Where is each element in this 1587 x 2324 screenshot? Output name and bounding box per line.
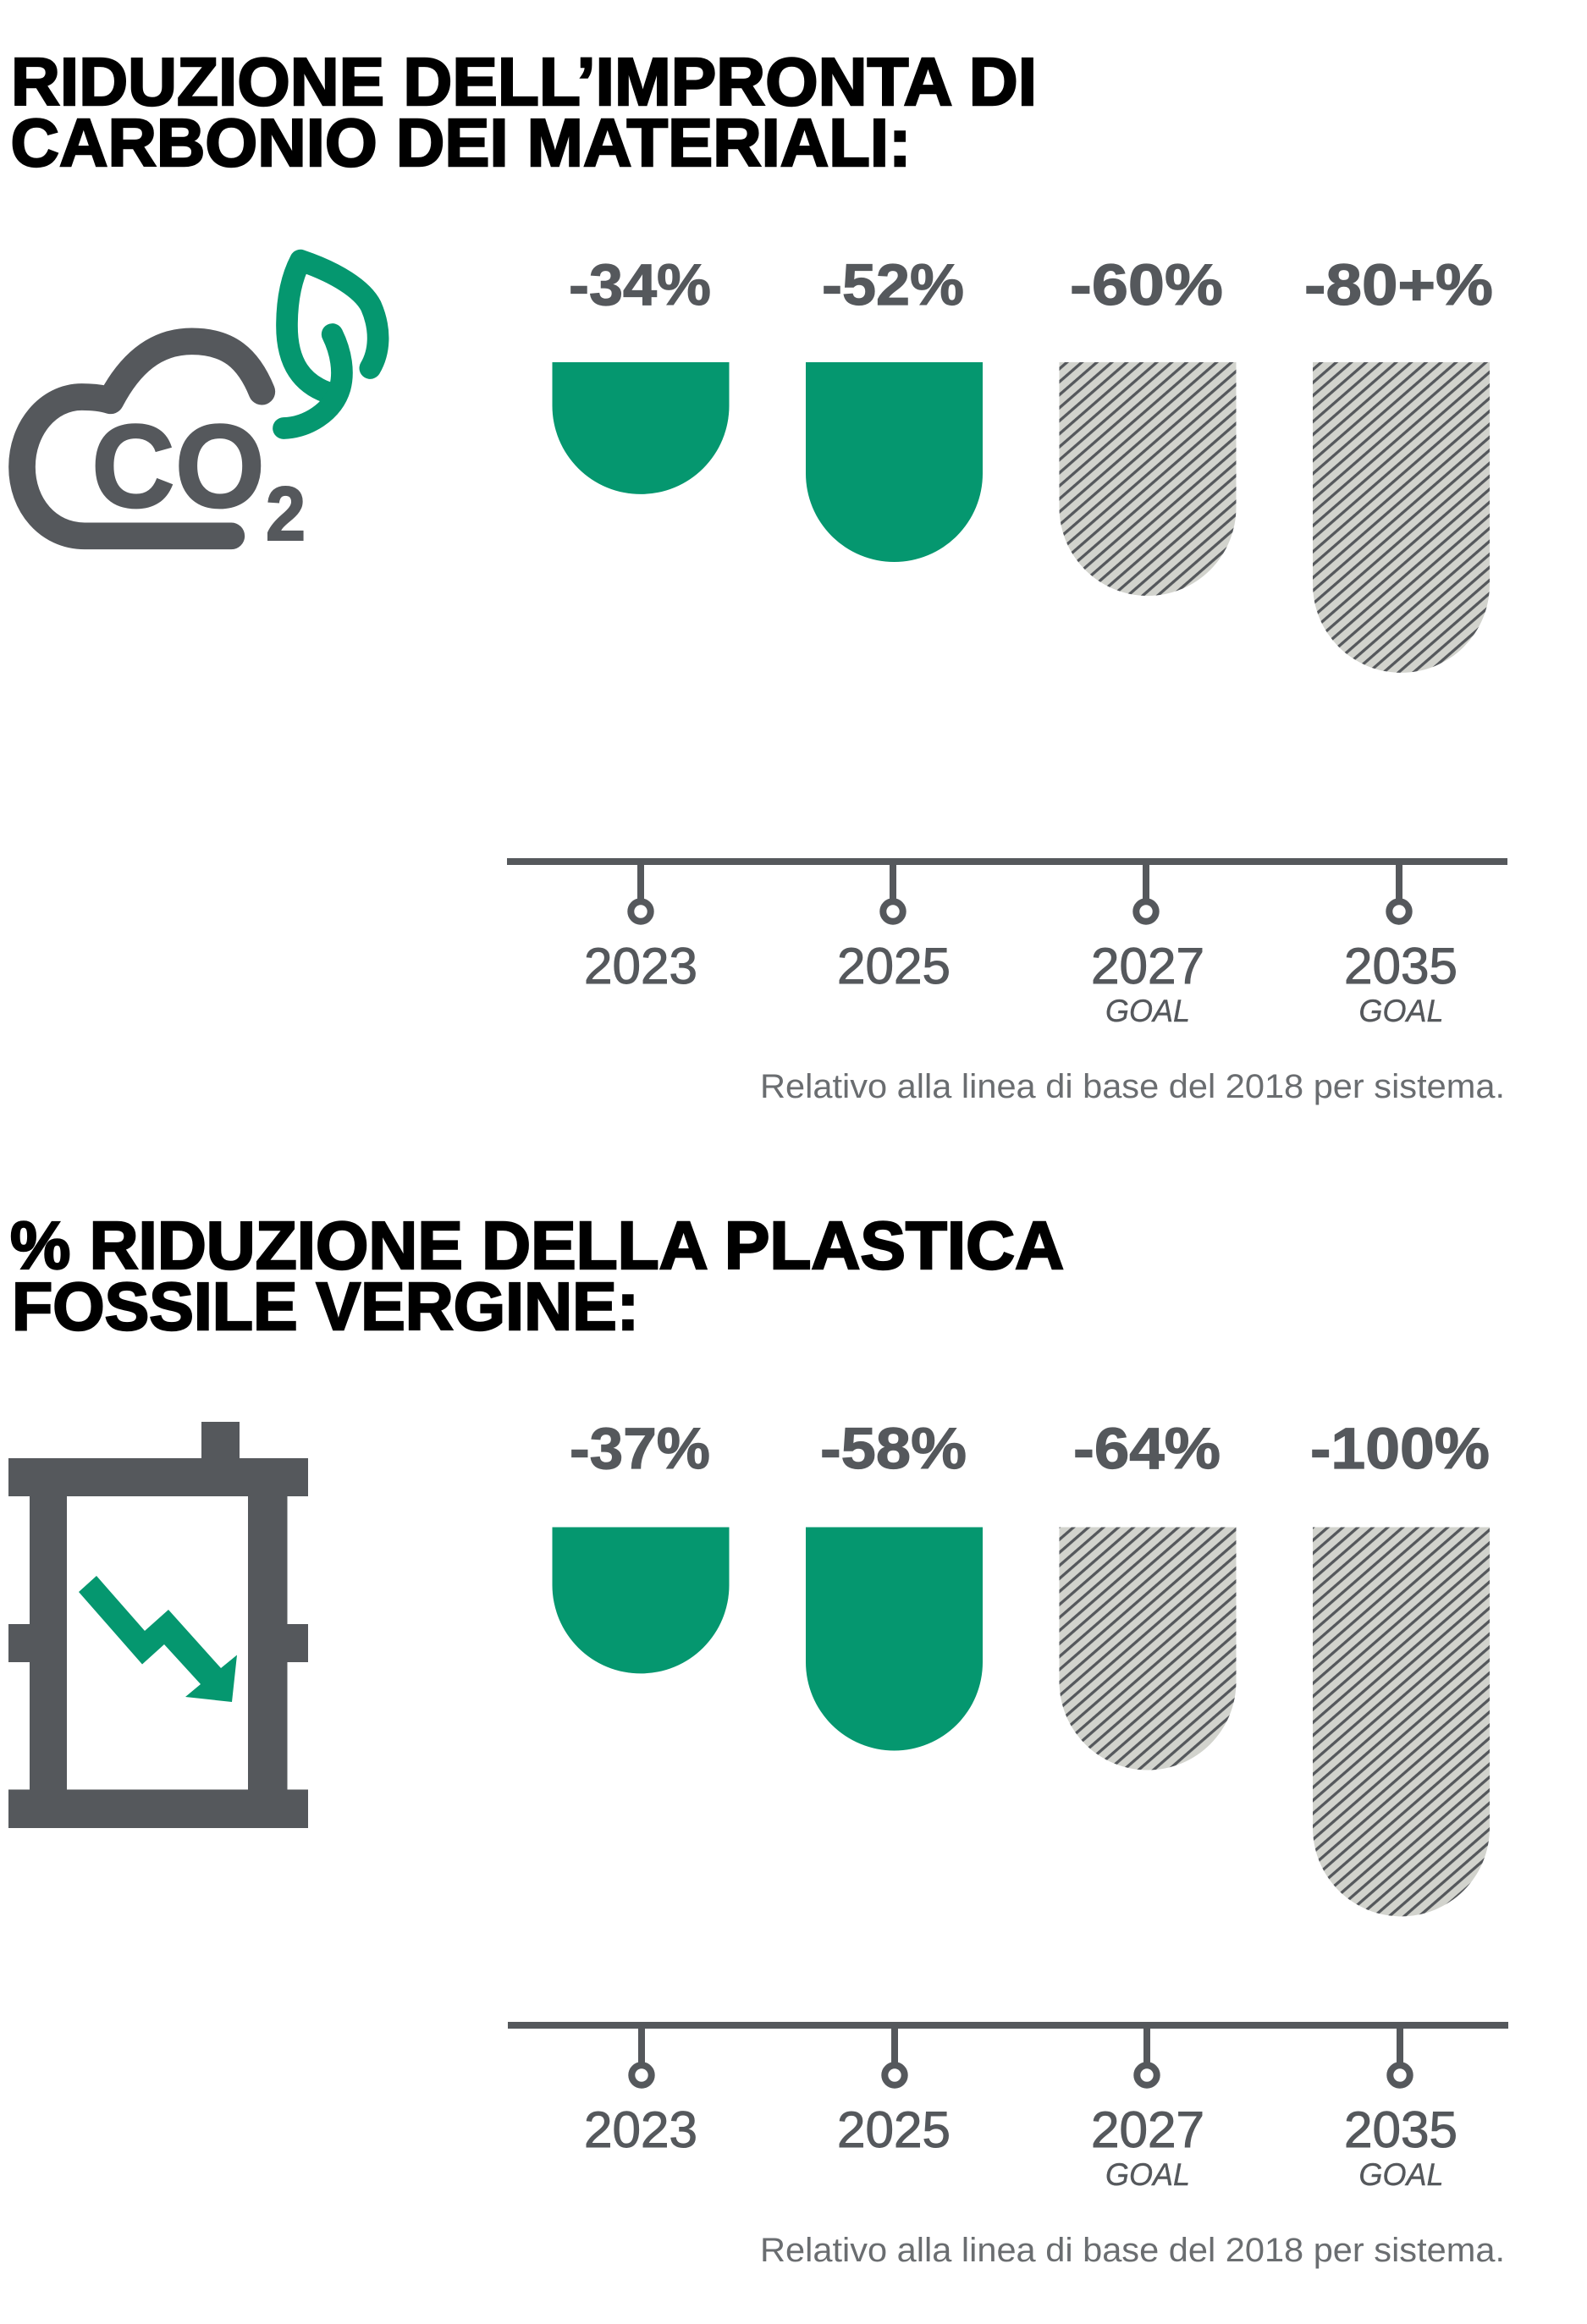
title: carbon footprint (10, 44, 1037, 180)
year labels: 2023 (584, 2101, 697, 2158)
value labels (569, 252, 1493, 317)
title: carbon footprint: RIDUZIONE DELL’IMPRONTA DI (11, 44, 1037, 119)
value labels: -100% (1310, 1416, 1490, 1481)
year labels: 2035 (1344, 938, 1458, 994)
value labels: -64% (1073, 1416, 1221, 1481)
value labels: -34% (569, 252, 711, 317)
value labels: -37% (570, 1416, 710, 1481)
bar: 2027 goal (1060, 1527, 1236, 1770)
timeline axis (508, 2022, 1508, 2085)
icon: barrel with down arrow (8, 1422, 308, 1828)
icon: CO2 cloud with leaf (22, 261, 378, 557)
year labels: GOAL (1105, 994, 1190, 1028)
value labels: -60% (1070, 252, 1223, 317)
value labels: -80+% (1304, 252, 1493, 317)
bar: 2025 (806, 362, 983, 562)
footnote: Relativo alla linea di base del 2018 per sistema. (760, 2232, 1505, 2269)
value labels: -52% (822, 252, 964, 317)
footnote: Relativo alla linea di base del 2018 per sistema. (760, 1068, 1505, 1105)
year labels (584, 2101, 1458, 2192)
bar: 2035 goal (1313, 362, 1490, 673)
year labels: 2035 (1344, 2101, 1458, 2158)
bar: 2027 goal (1060, 362, 1236, 596)
title: virgin plastic: FOSSILE VERGINE: (12, 1269, 639, 1344)
panel: carbon footprint reduction (10, 44, 1507, 1105)
year labels: 2025 (837, 938, 951, 994)
year labels: 2027 (1091, 938, 1204, 994)
year labels: GOAL (1359, 994, 1444, 1028)
title: carbon footprint: CARBONIO DEI MATERIALI: (10, 105, 911, 180)
title: virgin plastic: % RIDUZIONE DELLA PLASTICA (10, 1208, 1064, 1283)
year labels: 2027 (1091, 2101, 1204, 2158)
icon: CO2 cloud with leaf: CO (91, 399, 265, 532)
title: virgin plastic (10, 1208, 1064, 1344)
bar: 2035 goal (1313, 1527, 1490, 1916)
year labels: GOAL (1359, 2157, 1444, 2192)
bar: 2023 (552, 362, 730, 494)
bar: 2025 (806, 1527, 983, 1750)
bar: 2023 (552, 1527, 730, 1673)
year labels (584, 938, 1458, 1028)
value labels (570, 1416, 1490, 1481)
icon: CO2 cloud with leaf: 2 (266, 472, 306, 557)
panel: virgin fossil plastic reduction (8, 1208, 1508, 2269)
year labels: GOAL (1105, 2157, 1190, 2192)
value labels: -58% (820, 1416, 967, 1481)
timeline axis (507, 858, 1507, 922)
year labels: 2025 (837, 2101, 951, 2158)
year labels: 2023 (584, 938, 697, 994)
